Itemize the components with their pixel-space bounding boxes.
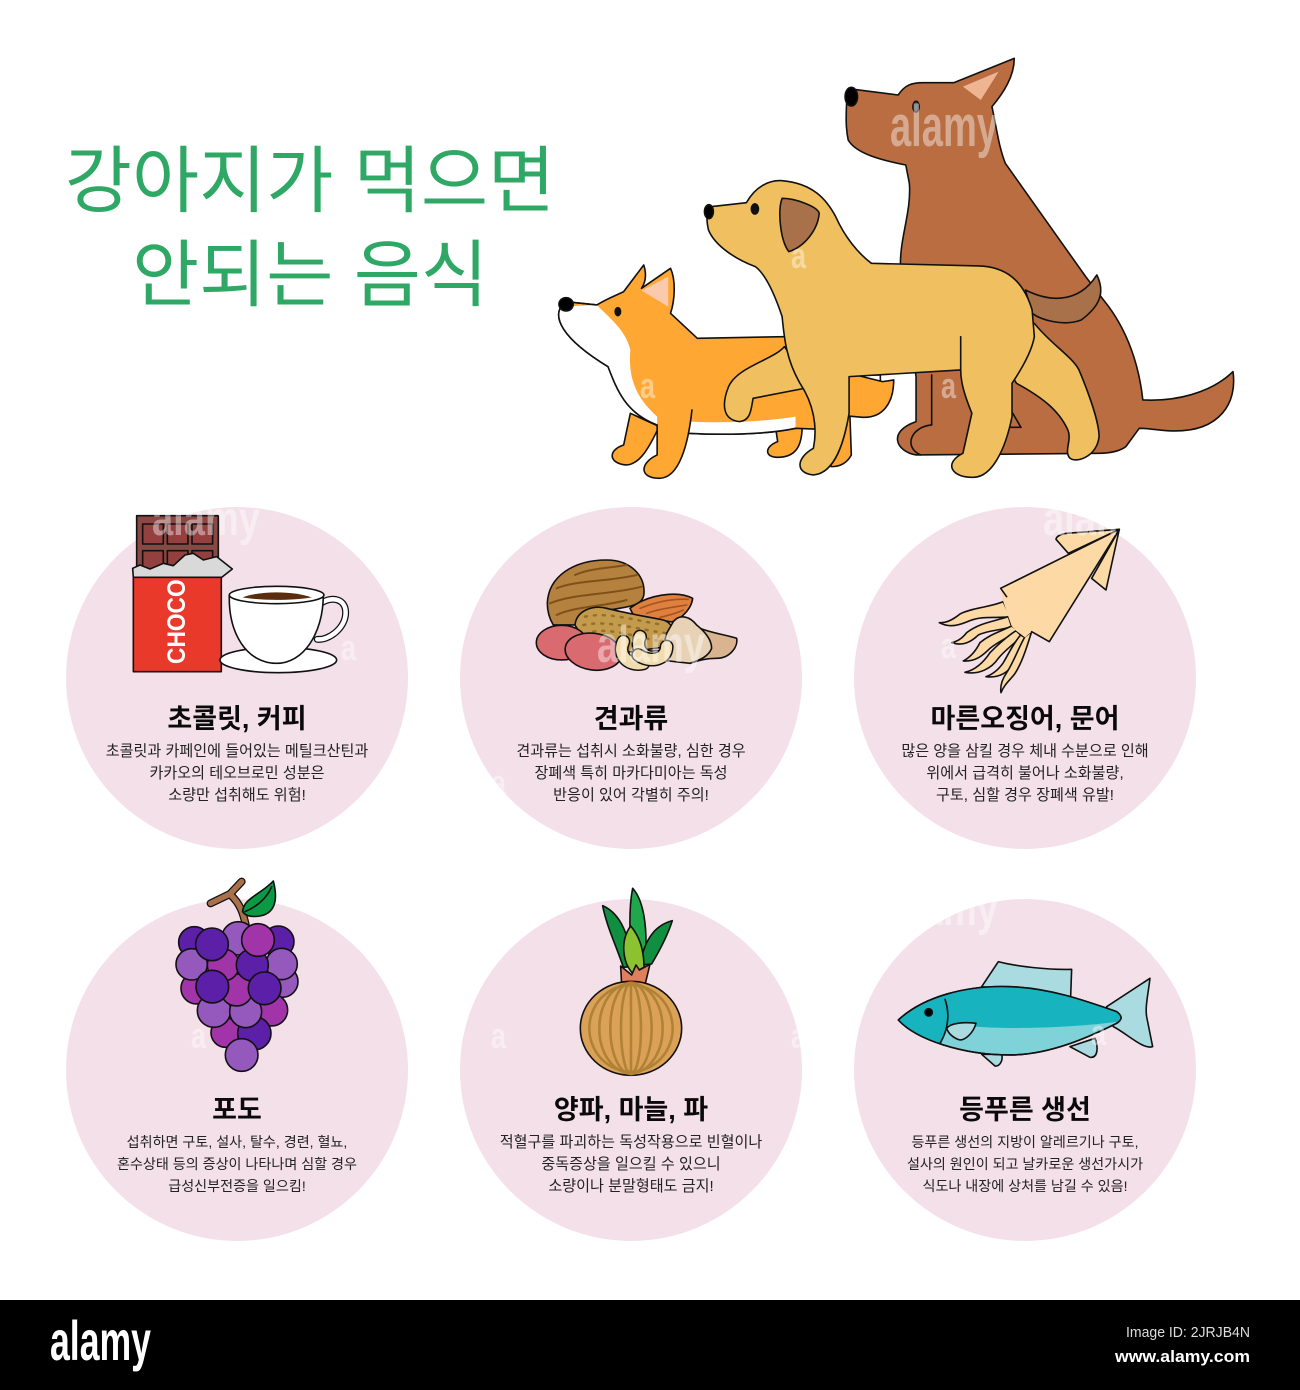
heading: 등푸른 생선 (959, 1095, 1091, 1125)
stock watermarks: alamy (890, 94, 998, 159)
description: 식도나 내장에 상처를 남길 수 있음! (922, 1178, 1128, 1194)
icon: chocolate bar and coffee cup: CHOCO (164, 579, 191, 664)
heading: 양파, 마늘, 파 (554, 1095, 708, 1125)
description: 혼수상태 등의 증상이 나타나며 심할 경우 (117, 1156, 357, 1172)
stock watermarks (152, 94, 1151, 1056)
description: 반응이 있어 각별히 주의! (553, 787, 709, 804)
icon: squid (939, 529, 1119, 693)
corgi (559, 265, 894, 478)
description: 초콜릿과 카페인에 들어있는 메틸크산틴과 (106, 743, 368, 760)
panel background circle (460, 899, 802, 1241)
panel background circle (66, 507, 408, 849)
heading: 견과류 (594, 704, 668, 734)
stock watermarks: alamy (597, 616, 705, 674)
panel background circle (460, 507, 802, 849)
description: 많은 양을 삼킬 경우 체내 수분으로 인해 (901, 743, 1149, 760)
brown dog (845, 58, 1234, 455)
website: www.alamy.com (1114, 1347, 1250, 1366)
icon: grapes (176, 881, 298, 1071)
icon: fish (898, 962, 1153, 1066)
stock watermarks: a (491, 1015, 507, 1056)
description: 소량만 섭취해도 위험! (168, 787, 306, 804)
stock watermarks: a (491, 762, 507, 803)
icon: onion (580, 888, 682, 1075)
description: 등푸른 생선의 지방이 알레르기나 구토, (911, 1134, 1139, 1150)
heading: 마른오징어, 문어 (931, 704, 1119, 734)
image id: Image ID: 2JRJB4N (1126, 1324, 1250, 1341)
stock watermarks: alamy (1043, 493, 1151, 546)
illustration: three dogs (559, 58, 1234, 478)
stock watermarks: a (341, 627, 357, 668)
description: 급성신부전증을 일으킴! (168, 1178, 306, 1194)
description (500, 1134, 762, 1195)
icon: nuts (536, 560, 737, 674)
description (907, 1134, 1143, 1194)
stock watermarks: a (1091, 1012, 1107, 1053)
panel: grapes (66, 881, 408, 1241)
description: 소량이나 분말형태도 금지! (548, 1178, 714, 1195)
stock watermarks: a (191, 1015, 207, 1056)
stock watermarks: alamy (890, 883, 998, 936)
stock watermarks: a (941, 365, 957, 406)
panel background circle (66, 899, 408, 1241)
footer bar (0, 1300, 1300, 1390)
description: 장폐색 특히 마카다미아는 독성 (534, 765, 728, 782)
description (106, 743, 368, 804)
description: 구토, 심할 경우 장폐색 유발! (936, 787, 1114, 804)
icon: chocolate bar and coffee cup (133, 516, 346, 673)
description: 설사의 원인이 되고 날카로운 생선가시가 (907, 1156, 1143, 1172)
panel: dried squid and octopus (854, 507, 1196, 849)
panel background circle (854, 899, 1196, 1241)
footer logo: alamy (50, 1309, 151, 1372)
heading: 포도 (212, 1095, 262, 1125)
description: 위에서 급격히 불어나 소화불량, (926, 765, 1124, 782)
description: 중독증상을 일으킬 수 있으니 (541, 1156, 721, 1173)
stock watermarks: a (941, 625, 957, 666)
panel: nuts (460, 507, 802, 849)
description (901, 743, 1149, 804)
panel: blue-backed fish (854, 899, 1196, 1241)
yellow dog (704, 181, 1099, 477)
description: 카카오의 테오브로민 성분은 (149, 765, 325, 782)
description: 섭취하면 구토, 설사, 탈수, 경련, 혈뇨, (127, 1134, 347, 1150)
panel: chocolate and coffee (66, 507, 408, 849)
stock watermarks: a (791, 1015, 807, 1056)
panel: onion, garlic, green onion (460, 888, 802, 1241)
description (117, 1134, 357, 1194)
stock watermarks: a (791, 235, 807, 276)
description: 견과류는 섭취시 소화불량, 심한 경우 (516, 743, 746, 760)
description (516, 743, 746, 804)
title: 안되는 음식 (132, 235, 488, 316)
stock watermarks: alamy (152, 493, 260, 546)
title: 강아지가 먹으면 (65, 141, 555, 222)
title (65, 141, 555, 316)
stock watermarks: a (640, 365, 656, 406)
description: 적혈구를 파괴하는 독성작용으로 빈혈이나 (500, 1134, 762, 1151)
panel background circle (854, 507, 1196, 849)
heading: 초콜릿, 커피 (167, 704, 307, 734)
